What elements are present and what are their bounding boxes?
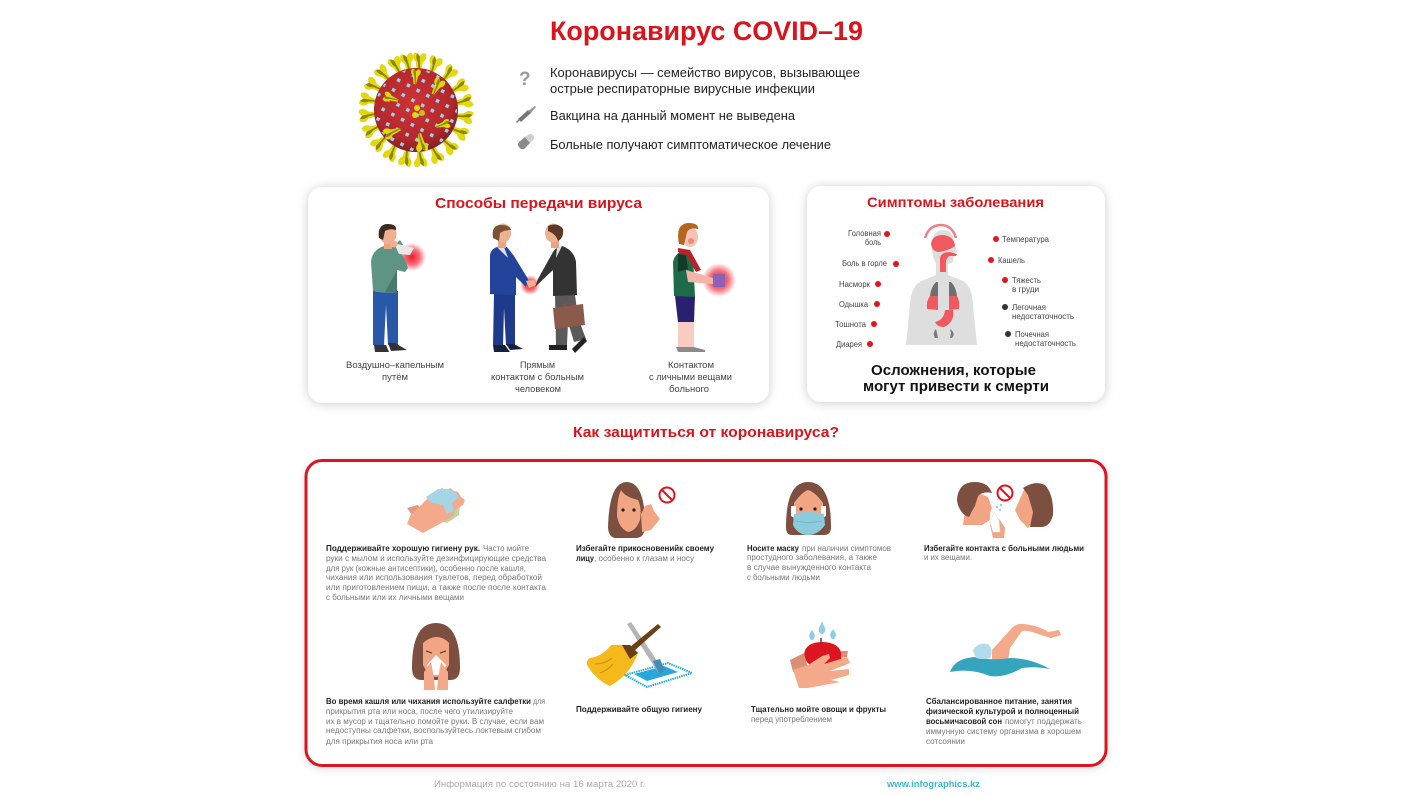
symptom labels: left column [835,229,899,349]
text: avoid sick people: Избегайте контакта с больными людьми [924,544,1084,553]
text: healthy lifestyle: Сбалансированное питание, занятия [926,697,1072,706]
text: healthy lifestyle: физической культурой и полноценный [926,707,1079,716]
text: avoid touching face: , особенно к глазам и носу [594,554,694,563]
captions: transmission routes: с личными вещами [649,372,732,383]
icon: syringe [516,106,536,123]
icon: washing hands [407,488,465,533]
text: hand hygiene: для рук (кожные антисептики), особенно после кашля, [326,564,526,573]
heading: symptoms: Симптомы заболевания [867,194,1044,210]
captions: transmission routes [346,360,732,395]
symptom labels: left column: Насморк [839,280,870,289]
illustration: handshake [490,224,587,353]
measure: avoid sick people [924,482,1084,562]
text: wear a mask: Носите маску [747,544,800,553]
panel: protection measures [306,460,1106,766]
captions: transmission routes: больного [669,384,709,395]
text: avoid touching face: Избегайте прикосновенийк своему [576,544,715,553]
text: hand hygiene: руки с мылом и используйте дезинфицирующие средства [326,554,547,563]
captions: transmission routes: человеком [515,384,561,395]
captions: transmission routes: Контактом [668,360,714,371]
measure: general hygiene [576,622,703,714]
measure: wear a mask [747,482,891,582]
intro text: what coronaviruses are [550,65,860,96]
measure: wash produce [751,621,886,724]
heading: transmission: Способы передачи вируса [435,195,643,212]
text: hand hygiene: Поддерживайте хорошую гигиену рук. [326,544,480,553]
footer: website: www.infographics.kz [886,779,980,790]
text: use tissues: для [533,697,545,706]
measure: hand hygiene [326,488,547,602]
text: wear a mask: в случае вынужденного контакта [747,563,872,572]
title: Коронавирус COVID–19 [550,16,863,46]
measure: use tissues [326,623,545,746]
symptom labels: right column: Температура [1002,235,1050,244]
text: hand hygiene: или приготовлением пищи, а также после после контакта [326,583,547,592]
captions: transmission routes: путём [382,372,408,383]
complications statement: Осложнения, которые [871,363,1036,379]
text: wash produce [751,705,886,724]
symptom labels: right column: Легочная [1012,303,1046,312]
text: healthy lifestyle: сотсоянии [926,737,965,746]
icon: sneezing man and woman [957,482,1053,538]
text: avoid touching face: лицу [576,554,595,563]
text: healthy lifestyle: восьмичасовой сон [926,717,1002,726]
text: hand hygiene: чихания или использования туалетов, перед обработкой [326,573,542,582]
text: wear a mask: при наличии симптомов [802,544,891,553]
symptom labels: right column: Почечная [1015,330,1049,339]
symptom labels: left column: боль [865,238,881,247]
intro text: what coronaviruses are: острые респираторные вирусные инфекции [550,81,815,96]
symptom labels: right column: Тяжесть [1012,276,1041,285]
text: hand hygiene: с больными или их личными вещами [326,593,464,602]
symptom labels: right column [988,235,1076,348]
symptom labels: right column: в груди [1012,285,1039,294]
text: healthy lifestyle [926,697,1082,746]
icon: broom and mop [587,622,692,687]
icon: question mark: ? [519,69,531,90]
text: use tissues: прикрытия рта или носа, после чего утилизируйте [326,707,514,716]
text: wear a mask: простудного заболевания, а также [747,553,878,562]
captions: transmission routes: контактом с больным [491,372,584,383]
text: avoid touching face [576,544,715,563]
text: wear a mask [747,544,891,582]
text: healthy lifestyle: помогут поддержать [1005,717,1082,726]
footer: date note: Информация по состоянию на 16 марта 2020 г. [434,779,645,790]
icon: hands washing apple [790,621,850,688]
text: use tissues: Во время кашля или чихания используйте салфетки [326,697,531,706]
illustration: person with cup [673,223,736,352]
intro text: what coronaviruses are: Коронавирусы — семейство вирусов, вызывающее [550,65,860,80]
symptom labels: left column: Одышка [839,300,869,309]
measure: avoid touching face [576,482,715,563]
panel: symptoms [807,186,1105,402]
text: healthy lifestyle: иммунную систему организма в хорошем [926,727,1081,736]
text: avoid sick people: и их вещами. [924,553,972,562]
vaccine statement: Вакцина на данный момент не выведена [550,108,796,123]
measure: healthy lifestyle [926,624,1082,746]
symptom labels: right column: недостаточность [1012,312,1074,321]
symptom labels: left column: Тошнота [835,320,867,329]
text: use tissues [326,697,545,746]
text: hand hygiene [326,544,547,602]
symptom labels: right column: недостаточность [1015,339,1076,348]
captions: transmission routes: Прямым [520,360,555,371]
symptom labels: left column: Диарея [836,340,862,349]
icon: pill [518,134,534,149]
illustration: man sneezing [371,224,426,352]
icon: woman touching face [608,482,674,538]
complications statement: могут привести к смерти [863,379,1049,395]
text: use tissues: их в мусор и тщательно помойте руки. В случае, если вам [326,717,544,726]
text: use tissues: для прикрытия носа или рта [326,737,434,746]
icon: woman sneezing into tissue [412,623,460,690]
text: wash produce: Тщательно мойте овощи и фрукты [751,705,886,714]
text: avoid sick people [924,544,1084,562]
icon: woman in mask [786,482,831,535]
text: use tissues: недоступны салфетки, воспользуйтесь локтевым сгибом [326,726,541,735]
symptom labels: left column: Головная [848,229,881,238]
text: wear a mask: с больными людьми [747,573,820,582]
treatment statement: Больные получают симптоматическое лечение [550,137,831,152]
text: hand hygiene: Часто мойте [483,544,530,553]
complications statement [863,363,1049,395]
text: wash produce: перед употреблением [751,715,832,724]
text: general hygiene: Поддерживайте общую гигиену [576,705,703,714]
illustration: human body with organs [906,225,977,345]
panel: transmission routes [308,187,769,403]
symptom labels: right column: Кашель [998,256,1025,265]
heading: protection: Как защититься от коронавируса? [573,424,839,441]
symptom labels: left column: Боль в горле [842,259,888,268]
icon: swimmer [950,624,1061,676]
illustration: coronavirus [358,52,474,168]
captions: transmission routes: Воздушно–капельным [346,360,444,371]
